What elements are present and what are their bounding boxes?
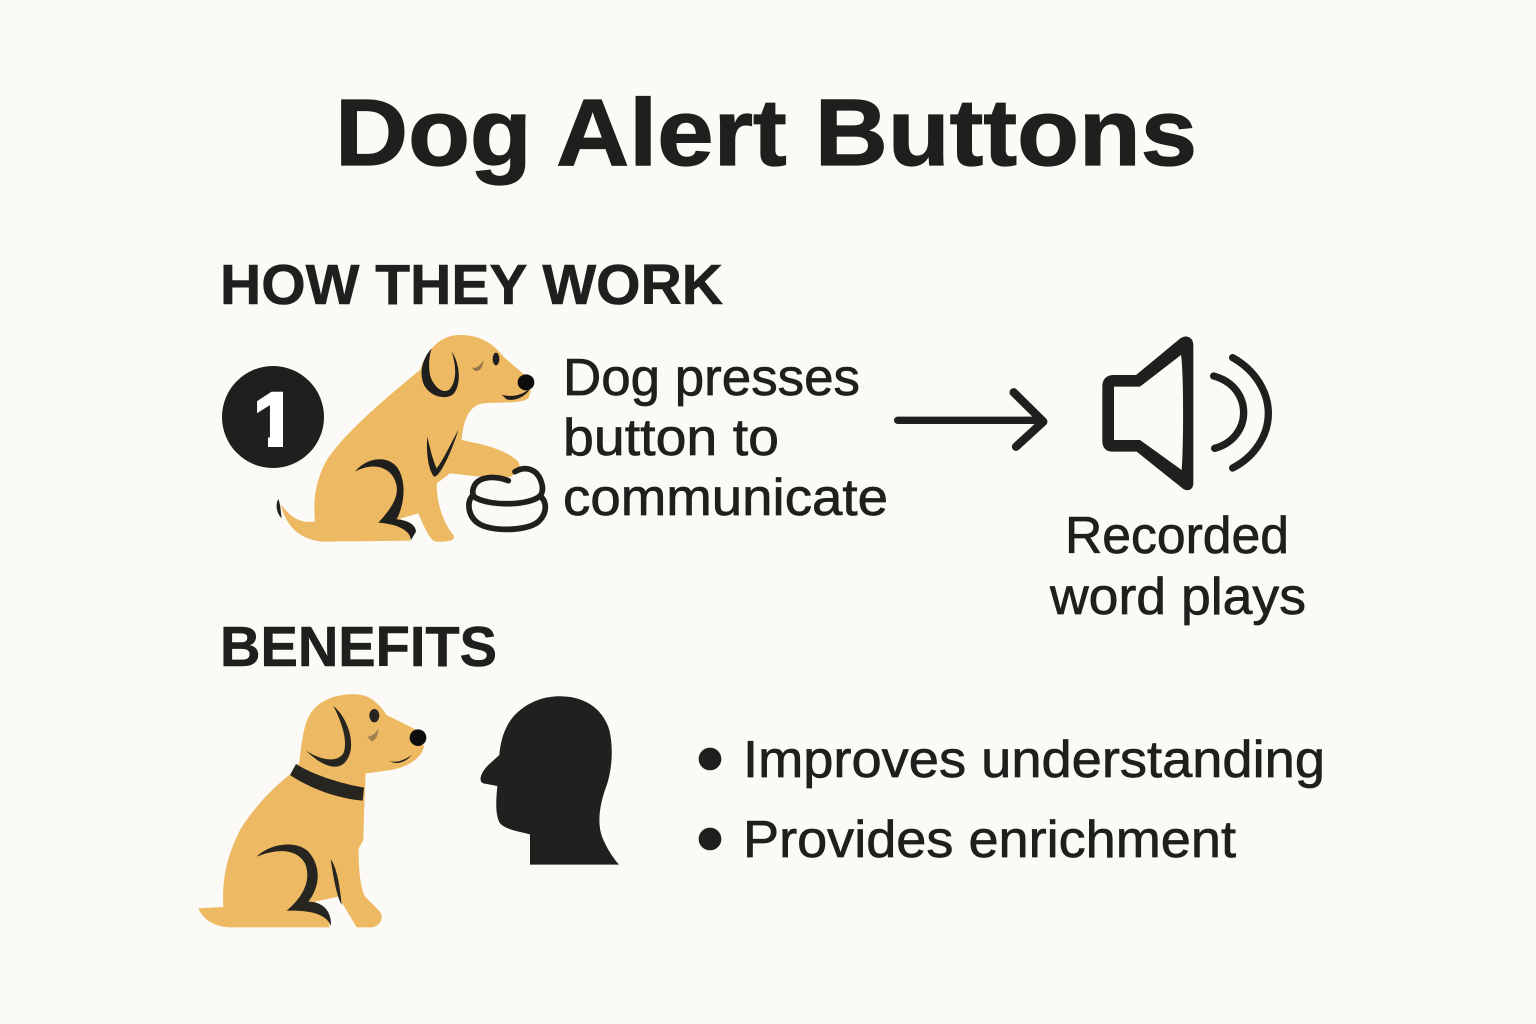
speaker caption: Recorded: [1065, 507, 1289, 565]
small sound wave: [1214, 376, 1244, 448]
dog haunch line: [257, 845, 331, 926]
heading: benefits: BENEFITS: [220, 615, 497, 679]
illustration: sitting dog with collar: [198, 694, 426, 927]
dog collar: [290, 764, 364, 801]
step text: Dog presses: [563, 349, 860, 407]
illustration: dog pressing button: [277, 335, 545, 542]
dog nose: [410, 729, 426, 746]
icon: speaker: [1102, 336, 1268, 490]
bullet 2: Provides enrichment: [743, 811, 1237, 869]
dog leg line: [331, 859, 342, 905]
step 1 number badge: [222, 366, 324, 468]
title: Dog Alert Buttons: [335, 80, 1197, 186]
dog eye: [369, 709, 379, 722]
benefits list: [699, 731, 1325, 869]
button icon: [469, 469, 545, 529]
dog eyebrow: [472, 360, 483, 371]
dog mouth: [502, 388, 530, 400]
dog eye: [493, 353, 499, 365]
large sound wave: [1233, 358, 1268, 468]
icon: human head silhouette: [481, 696, 619, 865]
dog ear: [306, 706, 351, 767]
step 1 number badge: 1: [253, 376, 297, 464]
step text: button to: [563, 409, 779, 467]
dog chest line: [427, 430, 458, 477]
tail tip: [277, 499, 282, 518]
heading: how they work: HOW THEY WORK: [220, 253, 723, 317]
dog haunch line: [355, 459, 416, 540]
speaker caption: word plays: [1049, 568, 1306, 626]
arrow: [898, 392, 1043, 447]
dog nose: [518, 374, 534, 390]
dog mouth: [389, 755, 412, 763]
speaker body: [1102, 336, 1193, 490]
step text: [563, 349, 888, 527]
step text: communicate: [563, 469, 888, 527]
speaker caption: [1049, 507, 1306, 626]
dog ear: [422, 348, 459, 397]
bullet 1: Improves understanding: [743, 731, 1325, 789]
dog eyebrow: [367, 728, 378, 741]
